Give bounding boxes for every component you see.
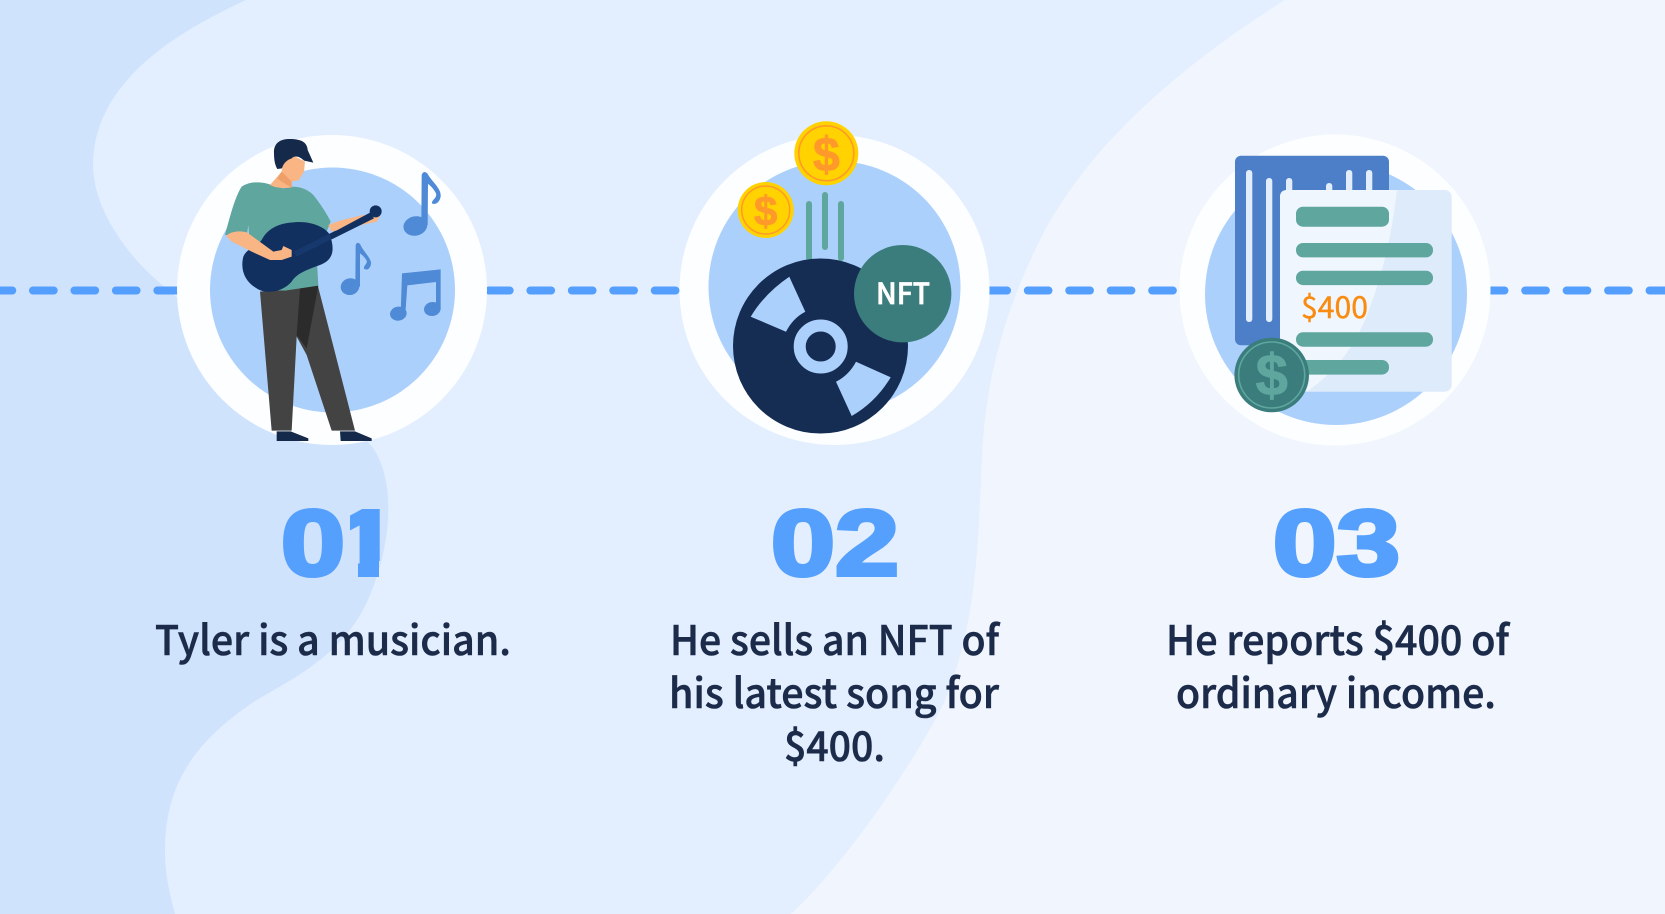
step 3 text: ordinary income.	[1176, 660, 1496, 720]
step 2 illustration: NFT disc and coins	[680, 121, 990, 445]
badge: NFT	[854, 245, 951, 342]
icon: vinyl disc	[733, 258, 908, 434]
icon: dollar coin: $	[1256, 343, 1288, 408]
icon: coin large	[794, 121, 858, 185]
number 01	[283, 508, 380, 578]
icon: music notes	[339, 172, 442, 322]
figure: shoes	[277, 431, 372, 441]
number 01: 0	[281, 491, 345, 595]
dashed timeline	[0, 286, 1665, 294]
number 01: 1	[336, 491, 398, 595]
step 3 text	[1166, 607, 1511, 720]
figure: arm	[226, 231, 292, 260]
figure: guitar	[242, 222, 333, 292]
icon: coin small: $	[754, 188, 777, 234]
icon: coin large: $	[813, 129, 840, 182]
icon: falling lines	[809, 195, 841, 258]
step 2 text: his latest song for	[669, 660, 999, 720]
step 2 text: $400.	[784, 713, 885, 773]
step 3 illustration: income documents	[1180, 134, 1490, 446]
step 1 text: Tyler is a musician.	[155, 607, 511, 667]
step 2 text	[669, 607, 1001, 773]
figure: shirt	[225, 182, 331, 291]
amount: $400	[1301, 283, 1368, 327]
badge: NFT: NFT	[876, 271, 930, 313]
icon: coin small	[738, 182, 794, 238]
step 2 text: He sells an NFT of	[670, 607, 1001, 667]
icon: front document	[1280, 190, 1452, 392]
figure: hair	[274, 139, 313, 169]
number 02: 02	[771, 491, 899, 595]
step 3 text: He reports $400 of	[1166, 607, 1511, 667]
icon: back document with bars	[1235, 156, 1389, 345]
step 1 illustration: musician	[177, 135, 487, 445]
figure: neck and face	[270, 156, 305, 188]
figure: pants	[260, 285, 355, 431]
number 03: 03	[1273, 491, 1400, 595]
icon: dollar coin	[1234, 338, 1309, 412]
